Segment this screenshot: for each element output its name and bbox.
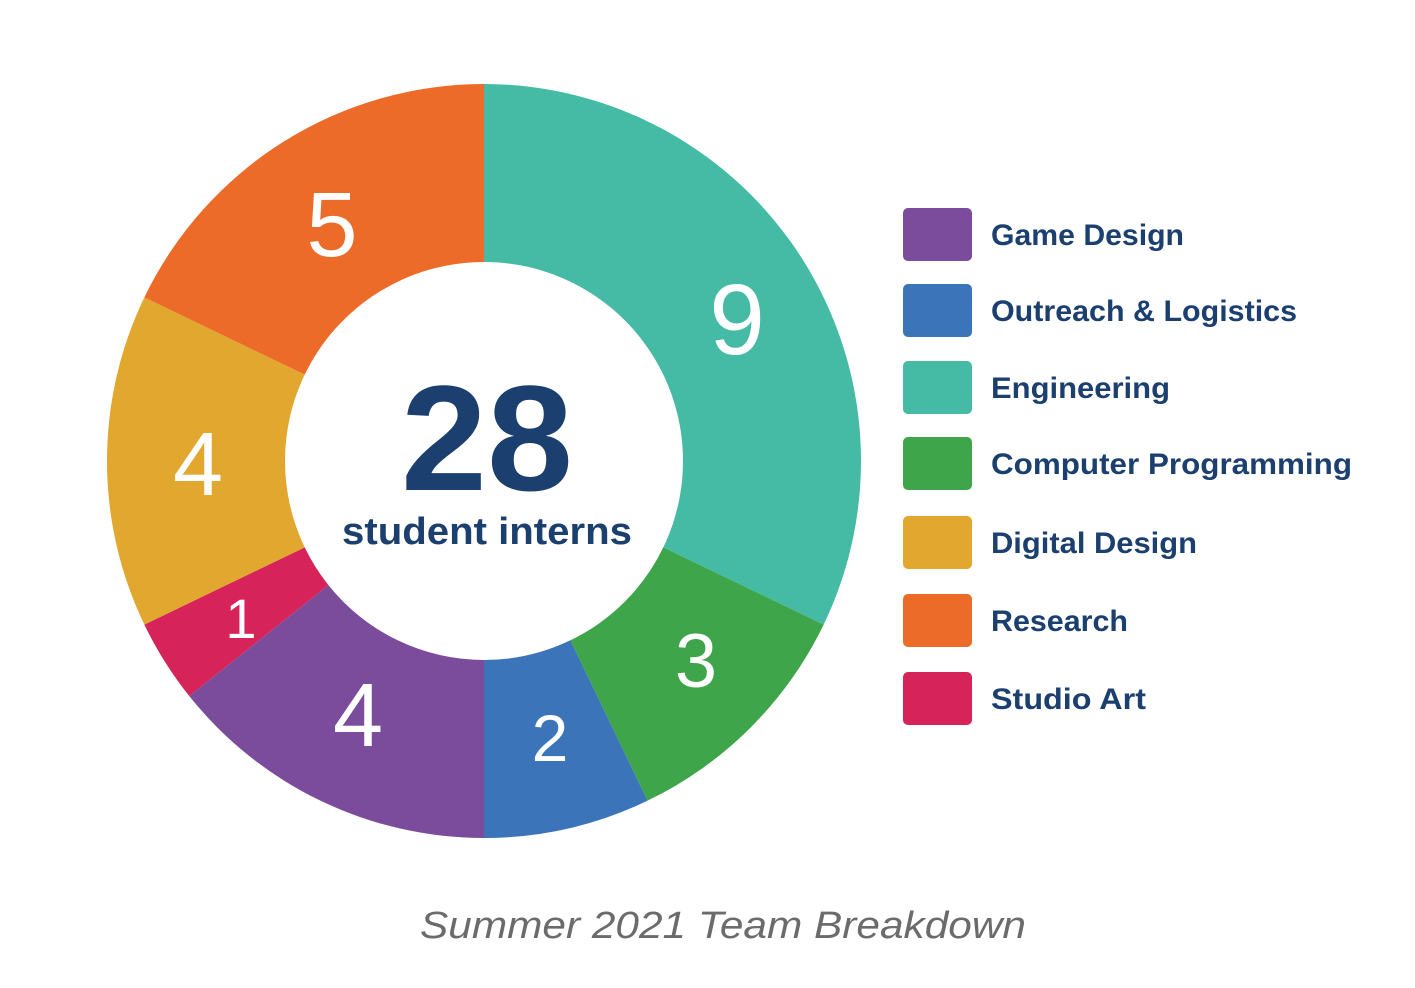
legend: [903, 208, 1352, 725]
legend: research: [903, 594, 1128, 647]
segment values: 4: [173, 415, 223, 515]
segment: outreach: [484, 640, 648, 838]
legend: game design: Game Design: [991, 219, 1184, 252]
segment: studio art: [144, 547, 328, 696]
legend: engineering: Engineering: [991, 372, 1170, 405]
segment values: [173, 174, 765, 775]
segment values: 2: [532, 701, 568, 775]
segment: research: [144, 84, 484, 375]
legend: engineering: [903, 361, 1170, 414]
legend: research: Research: [991, 605, 1128, 638]
segment: engineering: [484, 84, 861, 625]
legend: digital design: [903, 516, 1197, 569]
legend: digital design: Digital Design: [991, 527, 1197, 560]
legend: studio art: [903, 672, 1146, 725]
segment: computer programming: [570, 547, 824, 801]
legend: game design: [903, 208, 1184, 261]
center total: [342, 354, 632, 553]
segment values: 9: [709, 264, 765, 376]
segment: digital design: [107, 297, 305, 625]
segment values: 3: [675, 619, 717, 704]
center total: 28: [401, 354, 573, 522]
legend: outreach: [903, 284, 1297, 337]
segment values: 4: [333, 666, 383, 766]
donut chart: [107, 84, 861, 838]
legend: computer programming: Computer Programming: [991, 448, 1352, 481]
center total: student interns: [342, 511, 632, 553]
segment values: 1: [225, 587, 257, 650]
legend: computer programming: [903, 437, 1352, 490]
segment values: 5: [306, 174, 358, 276]
legend: studio art: Studio Art: [991, 683, 1146, 716]
legend: outreach: Outreach & Logistics: [991, 295, 1297, 328]
caption: Summer 2021 Team Breakdown: [420, 905, 1026, 947]
segment: game design: [189, 585, 484, 838]
